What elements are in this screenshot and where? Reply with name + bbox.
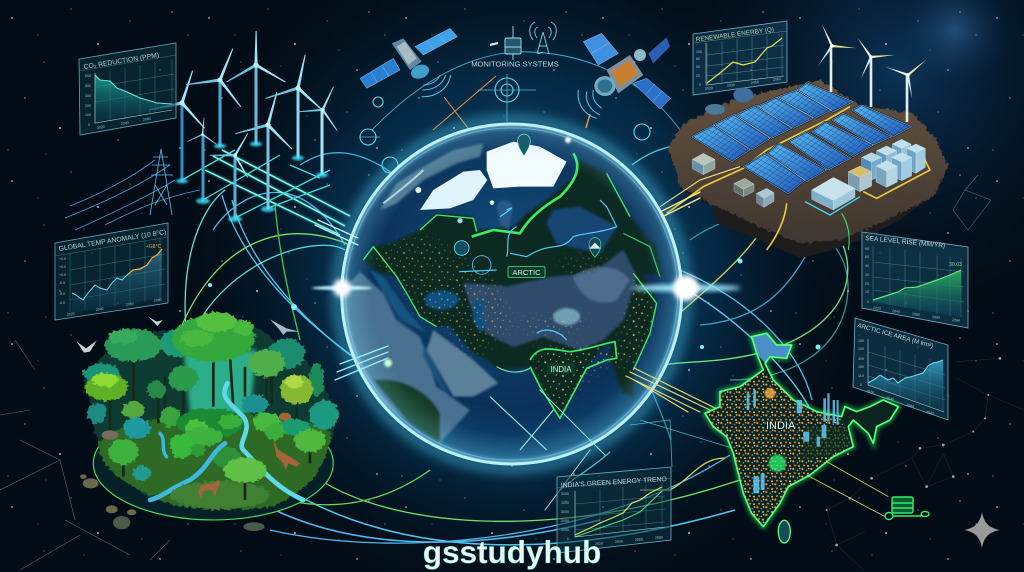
chart: arctic ice area: 0 [860, 383, 862, 387]
inland seas [370, 270, 580, 397]
chart: CO2 reduction: 0 [88, 123, 90, 127]
chart: India's green energy trend: 1000 [561, 528, 569, 532]
ice: Greenland [420, 170, 487, 210]
chart: global temperature anomaly: -0.0 [59, 281, 65, 285]
chart: sea level rise: 2020 [873, 306, 881, 311]
arrows: orange beams to globe [433, 76, 590, 130]
chart: India's green energy trend: 3000 [561, 501, 569, 505]
chart: sea level rise: 30.03 [949, 262, 962, 268]
chart: CO2 reduction: 2060 [143, 117, 151, 122]
rock surface [668, 80, 948, 243]
chart: sea level rise: 2060 [912, 312, 920, 317]
chart: India's green energy trend: 2020 [595, 541, 603, 546]
chart: CO2 reduction: 100 [85, 113, 91, 117]
globe outer glow [338, 120, 686, 468]
wind farm grid base lines [182, 150, 350, 235]
forest light shafts [183, 350, 257, 413]
India glow [705, 333, 898, 527]
chart: CO2 reduction: 600 [85, 74, 91, 78]
chart: sea level rise: 2040 [892, 309, 900, 314]
chart: arctic ice area: 2080 [926, 410, 935, 416]
chart: sea level rise: SEA LEVEL RISE (MM/YR) [865, 235, 945, 250]
chart: arctic ice area: 150 [858, 339, 864, 343]
chart: CO2 reduction: CO₂ REDUCTION (PPM) [83, 52, 160, 71]
wires from India [807, 462, 888, 517]
glowing blue rivers [460, 200, 617, 450]
landmass: North America edge [380, 143, 483, 210]
chart: sea level rise: 80 [865, 255, 869, 259]
floating island with solar panels [660, 80, 948, 258]
chart: renewable energy: 2050 [751, 80, 759, 85]
chart: global temperature anomaly: 2020 [67, 312, 75, 317]
chart: renewable energy: 80 [696, 57, 700, 61]
rock underside [680, 167, 948, 258]
chart: arctic ice area: 2040 [886, 396, 895, 402]
chart: sea level rise: 30 [865, 273, 869, 277]
chart: India's green energy trend: 2060 [635, 537, 643, 542]
river [150, 383, 303, 500]
chart: global temperature anomaly [55, 223, 168, 320]
chart: arctic ice area: ARCTIC ICE AREA (M km²) [856, 322, 934, 350]
light flares on the globe edge [312, 137, 741, 367]
chart: renewable energy [693, 21, 787, 95]
chart: global temperature anomaly: +G8°C [146, 244, 162, 250]
chart: CO2 reduction: 2040 [121, 121, 129, 126]
power lines and pylon [65, 149, 200, 230]
landmass: Africa [340, 272, 470, 443]
icons: ring nodes around the globe [360, 74, 650, 173]
forest ecosystem [77, 312, 339, 531]
chart: renewable energy: 50 [696, 65, 700, 69]
chart: global temperature anomaly: -0.0 [59, 292, 65, 296]
bright city glow [765, 388, 775, 399]
India detail map [705, 333, 898, 543]
forest ground [97, 413, 332, 510]
holographic city towers [747, 390, 839, 493]
chart: global temperature anomaly: 2040 [96, 307, 104, 312]
chart: sea level rise: 2090 [952, 318, 960, 323]
chart: renewable energy: 2030 [727, 83, 735, 88]
animals [102, 413, 300, 498]
glowing green borders [363, 153, 660, 418]
map pin markers [415, 134, 601, 274]
chart: global temperature anomaly: -0.0 [59, 301, 65, 305]
chart: arctic ice area: 2060 [906, 403, 915, 409]
chart: renewable energy: 100 [696, 50, 702, 54]
chart: India's green energy trend: 3000 [561, 510, 569, 514]
globe label: Arctic [508, 266, 545, 278]
chart: CO2 reduction [79, 43, 176, 135]
wind farm [65, 31, 354, 235]
green energy hub icon [769, 455, 786, 472]
tree trunks [110, 350, 310, 477]
satellite: left [360, 28, 457, 97]
monitoring systems label and icons [433, 22, 590, 130]
chart: renewable energy: 2020 [705, 86, 713, 91]
chart: CO2 reduction: 300 [85, 94, 91, 98]
rocks [80, 474, 265, 531]
satellite: right [578, 33, 671, 118]
chart: sea level rise: 0 [867, 300, 869, 304]
city lights [368, 230, 660, 418]
globe [338, 120, 686, 468]
chart: renewable energy: 20 [696, 74, 700, 78]
globe label: India: INDIA [551, 365, 572, 374]
chart: renewable energy: 2060 [773, 77, 781, 82]
chart: India's green energy trend: 0 [567, 537, 569, 541]
ice: Arctic cap [487, 142, 567, 188]
constellation network lines [0, 175, 1024, 570]
chart: global temperature anomaly: GLOBAL TEMP ANOMALY (10 8°C) [58, 228, 167, 253]
chart: India's green energy trend: 2000 [561, 519, 569, 523]
chart: renewable energy: 0 [699, 83, 701, 87]
chart: CO2 reduction: 500 [85, 84, 91, 88]
chart: global temperature anomaly: +0.0 [59, 265, 66, 269]
chart: India's green energy trend: 3000 [561, 492, 569, 496]
chart: arctic ice area: 100 [858, 347, 864, 351]
chart: arctic ice area: 150 [858, 365, 864, 369]
globe label: Arctic: ARCTIC [512, 268, 541, 277]
chart: sea level rise [862, 232, 968, 328]
chart: arctic ice area: 2020 [866, 389, 875, 395]
chart: sea level rise: 90 [865, 247, 869, 251]
chart: India's green energy trend: INDIA'S GREEN ENERGY TRENO [561, 476, 667, 489]
battery storage towers [692, 139, 925, 210]
India landmass [705, 333, 898, 527]
chart: sea level rise: 20 [865, 282, 869, 286]
icon: monitoring device [490, 26, 521, 60]
Central and East Asia highlands [463, 250, 637, 350]
landmass: Arabia [427, 330, 498, 397]
icon: sparkle watermark [964, 512, 1000, 548]
forest backing mass [83, 318, 337, 500]
glowing ring under forest [93, 407, 333, 520]
globe label: India [547, 363, 575, 374]
heading: monitoring systems: MONITORING SYSTEMS [471, 60, 559, 68]
chart: global temperature anomaly: 2080 [154, 298, 162, 303]
island wind turbines [802, 15, 928, 122]
soft land layers [340, 143, 663, 443]
chart: renewable energy: RENEWABLE ENERBY (Q) [695, 26, 774, 43]
chart: sea level rise: 40 [865, 264, 869, 268]
label: India: INDIA [766, 420, 796, 432]
solar panels [692, 83, 912, 194]
chart: sea level rise: 10 [865, 290, 869, 294]
chart: arctic ice area [853, 318, 948, 420]
power conduits [660, 107, 930, 250]
chart: CO2 reduction: 200 [85, 104, 91, 108]
chart: India's green energy trend: 2040 [615, 539, 623, 544]
icon: green energy storage [885, 497, 929, 520]
chart: arctic ice area: 110 [858, 374, 864, 378]
chart: arctic ice area: 300 [858, 357, 864, 361]
chart: India's green energy trend: 2090 [655, 535, 663, 540]
connection bundles into the globe [315, 192, 715, 510]
chart: global temperature anomaly: +0.0 [59, 257, 66, 261]
chart: sea level rise: 2080 [932, 315, 940, 320]
icon: antenna tower [530, 22, 556, 54]
brand wordmark: gsstudyhub [423, 534, 601, 570]
chart: global temperature anomaly: +0.0 [59, 273, 66, 277]
chart: CO2 reduction: 2020 [97, 125, 105, 130]
Sri Lanka [778, 520, 790, 543]
atmosphere rim [341, 123, 682, 465]
tree canopies [83, 312, 339, 481]
data connection arcs around the globe [180, 52, 848, 545]
chart: India's green energy trend [557, 467, 671, 553]
chart: global temperature anomaly: 2060 [126, 302, 134, 307]
birds [77, 317, 299, 353]
landmass: Eurasia [363, 160, 663, 418]
